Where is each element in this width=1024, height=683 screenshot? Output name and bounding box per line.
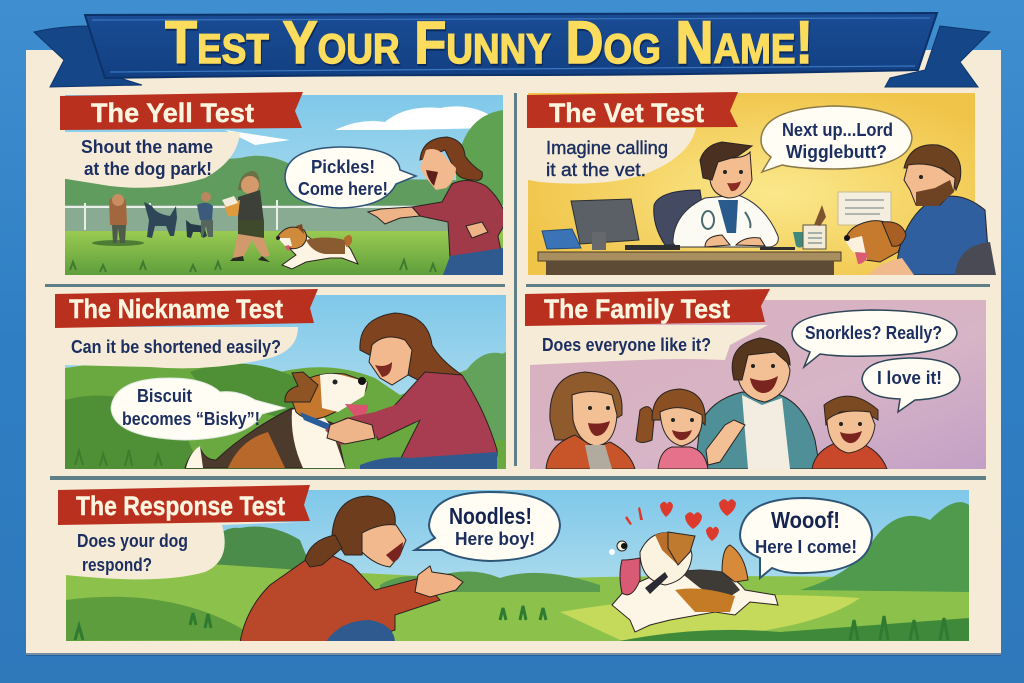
scene: vet office [528,93,996,275]
ribbon: The Response Test: The Response Test [76,491,285,521]
panel: The Yell Test [60,92,510,275]
speech bubble: Wooof [740,498,872,578]
cream intro patch [60,327,298,368]
collie dog [185,372,368,468]
man with cup [222,171,270,262]
text: Does your dog respond: respond? [82,555,152,575]
ribbon: The Yell Test [60,92,303,130]
speech bubble: Pickles: Pickles! [311,157,375,177]
cream intro patch [60,132,240,188]
text: Shout the name: Shout the name [81,137,213,157]
speech bubble: Biscuit [111,378,285,440]
ribbon: The Family Test: The Family Test [544,294,730,324]
title text: Test Your Funny Dog Name! [165,9,813,76]
speech bubble: Noodles: Noodles! [449,503,532,529]
text: shortened easily: Can it be shortened easily? [71,337,281,357]
scene: dog park [65,95,510,275]
speech bubble: Wooof: Here I come! [755,537,857,557]
ribbon: The Response Test [58,485,310,525]
divider lines [45,93,990,480]
speech bubble: Pickles [285,147,416,208]
speech bubble: I love it [862,358,960,412]
speech bubble: Noodles: Here boy! [455,529,535,549]
desk [538,245,841,275]
scene: family [530,300,986,469]
speech bubble: Biscuit: Biscuit [137,386,192,406]
running dog [609,532,778,632]
boy [812,396,887,469]
desk items [793,205,826,249]
ribbon: The Vet Test: The Vet Test [549,98,704,128]
man in hoodie [896,145,996,275]
chair [654,190,708,245]
ribbon: The Nickname Test: The Nickname Test [69,294,283,324]
speech bubble: Lord Wigglebutt: Wigglebutt? [786,142,887,162]
small background dog [186,220,207,238]
person in background [109,194,127,243]
scene: nickname [65,295,506,469]
panel: The Nickname Test [55,289,506,469]
woman with hands on dog [325,313,497,469]
text: everyone like it: Does everyone like it? [542,335,711,355]
speech bubble: Lord Wigglebutt: Next up...Lord [782,120,893,140]
father [695,338,820,469]
text: Imagine calling: it at the vet. [546,160,646,180]
monitor [542,199,639,250]
left banner tail [34,26,142,87]
vet dog [844,221,914,275]
kneeling woman [240,496,463,643]
text: Imagine calling: Imagine calling [546,138,668,158]
hearts [625,499,736,541]
cream intro patch [528,128,696,184]
panel: The Vet Test [527,92,996,275]
background owner [197,192,213,237]
speech bubble: Pickles: Come here! [298,179,388,199]
cream intro patch [60,522,300,579]
panel: The Family Test [525,289,986,469]
scene: response [66,490,969,643]
wall notice [838,192,891,225]
speech bubble: Snorkles: Snorkles? Really? [805,323,942,343]
speech bubble: I love it: I love it! [877,368,942,388]
running dog [276,224,358,269]
background dog [144,202,177,238]
ribbon: The Vet Test [527,92,738,128]
banner body [85,13,937,78]
cream intro patch [525,325,768,365]
panel: The Response Test [58,485,969,643]
title banner [34,9,990,87]
text: Shout the name: at the dog park! [84,159,212,179]
speech bubble: Wooof: Wooof! [771,507,840,533]
woman pointing [368,137,510,275]
text: Does your dog respond: Does your dog [77,531,188,551]
speech bubble: Lord Wigglebutt [761,106,912,172]
mother [546,372,635,469]
ribbon: The Yell Test: The Yell Test [91,98,254,128]
right banner tail [885,26,990,87]
speech bubble: Snorkles [792,310,957,367]
ribbon: The Family Test [525,289,770,326]
speech bubble: Biscuit: becomes “Bisky”! [122,409,260,429]
vet [673,142,778,247]
speech bubble: Noodles [415,492,560,561]
girl [636,389,745,469]
